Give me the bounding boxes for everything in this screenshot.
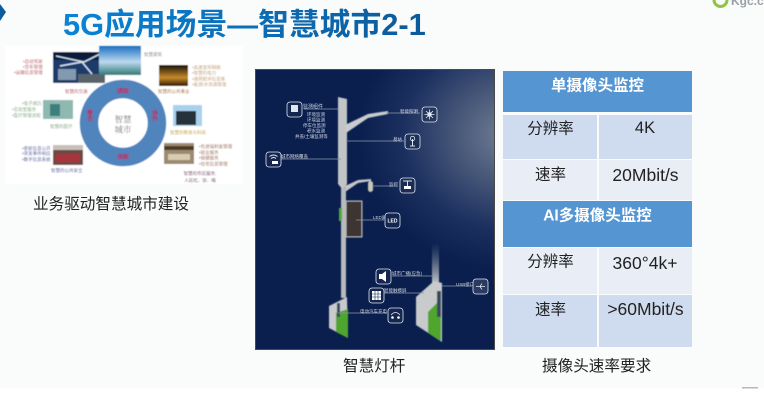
- ring chart: 协: [152, 109, 158, 117]
- text: smart transport: •货车管理: [23, 64, 43, 70]
- text: smart transport: [14, 58, 88, 95]
- header: single camera: 单摄像头监控: [551, 76, 644, 94]
- icon: USB: [473, 279, 488, 294]
- row: rate 60Mbit/s: >60Mbit/s: [607, 299, 684, 319]
- caption: camera rate requirements: 摄像头速率要求: [542, 357, 652, 375]
- text: smart transport: 智慧的交通: [65, 88, 88, 95]
- icon: LED: LED: [388, 218, 398, 224]
- lamp labels: 环境监测: [307, 111, 325, 118]
- row: rate 60Mbit/s: 速率: [535, 300, 566, 318]
- image: smart building: [99, 46, 141, 75]
- image: public safety: [53, 145, 83, 165]
- text: public safety: 智慧的公共安全: [51, 167, 83, 174]
- text: healthcare: •实验室服务: [12, 106, 37, 113]
- title: 5G应用场景—智慧城市2-1: [63, 7, 426, 42]
- text: healthcare: 智慧的医疗: [50, 123, 73, 130]
- row: resolution 4K: [503, 115, 692, 159]
- panel: smart city diagram: [5, 46, 243, 184]
- text: healthcare: [12, 100, 73, 130]
- panel: smart lamp post: [255, 69, 495, 350]
- text: smart transport: •自动驾驶: [23, 58, 43, 65]
- text: public safety: •更新信息公开: [22, 145, 51, 152]
- lamp labels: LED屏: [373, 215, 387, 221]
- row: rate 20Mbit/s: 速率: [535, 166, 566, 184]
- image: public utilities: [159, 65, 188, 86]
- text: healthcare: •医疗管理流程: [12, 112, 41, 119]
- image: healthcare: [43, 100, 73, 119]
- caption: smart city: 业务驱动智慧城市建设: [33, 195, 189, 213]
- row: rate 20Mbit/s: 20Mbit/s: [612, 165, 679, 185]
- lamp labels: 基站: [393, 136, 402, 143]
- header: AI multi camera: [503, 201, 692, 247]
- table: camera rate requirements: [503, 71, 692, 347]
- text: public utilities: •智慧的电力: [192, 70, 217, 76]
- ring chart: 合: [87, 115, 93, 123]
- row: resolution 360 4k+: [503, 248, 692, 294]
- ring chart: 创新: [117, 153, 129, 161]
- icon: base station: [405, 134, 420, 149]
- lamp labels: 城市网络覆盖: [281, 153, 308, 160]
- text: civil services: 智慧的市民服务:: [184, 170, 216, 177]
- text: civil services: •保健服务: [199, 154, 219, 162]
- lamp labels: 电动汽车充电: [360, 308, 387, 315]
- icon: keypad: [369, 288, 384, 303]
- caption: smart lamp post: 智慧灯杆: [343, 357, 406, 375]
- image: smart transport: [53, 52, 105, 83]
- logo: [714, 0, 764, 8]
- lamp labels: 监控: [389, 181, 398, 188]
- ring chart: 感知: [117, 87, 129, 95]
- ring chart: 整: [87, 109, 93, 117]
- icon: smart lighting: [422, 107, 437, 122]
- icon: surveillance: [400, 178, 415, 193]
- lamp labels: 监测组件: [303, 103, 323, 110]
- text: public utilities: •能源/水资源管理: [192, 81, 227, 88]
- lamp labels: 积水监测: [307, 128, 325, 134]
- image: civil services: [164, 143, 194, 164]
- text: education: 智慧的教育与科技: [170, 129, 206, 136]
- row: rate 20Mbit/s: [503, 160, 692, 200]
- row: resolution 360 4k+: 分辨率: [527, 252, 574, 270]
- icon: speaker: [376, 269, 391, 284]
- lamp labels: 城市广播(应急): [392, 270, 422, 277]
- text: smart transport: •运输信息管理: [14, 69, 43, 76]
- lamp labels: 停车位监测: [303, 122, 326, 129]
- icon: network coverage: [266, 152, 281, 167]
- LED screen: [346, 201, 362, 237]
- text: public utilities: 智慧的公共事业: [158, 88, 190, 95]
- text: civil services: •住宅信息管理: [199, 160, 228, 168]
- text: civil services: •先进福利金管理: [199, 143, 233, 150]
- second lamp post base: [416, 243, 442, 342]
- text: public utilities: [158, 64, 227, 95]
- ring chart: 作: [152, 115, 158, 123]
- ring chart: 智慧: [114, 114, 132, 126]
- lamp post main: [329, 97, 388, 338]
- text: civil services: [184, 143, 233, 184]
- row: resolution 360 4k+: 360°4k+: [613, 253, 677, 273]
- row: resolution 4K: 分辨率: [527, 120, 574, 138]
- page number mark: [742, 387, 758, 388]
- image: education: [173, 105, 202, 126]
- text: public utilities: •通用配评信息库: [192, 76, 226, 82]
- lamp labels: [281, 103, 474, 315]
- lamp labels: 智能触摸屏: [384, 287, 407, 294]
- ring chart: [87, 87, 158, 161]
- text: healthcare: •电子病历: [22, 100, 42, 107]
- connector lines: [281, 109, 472, 313]
- lamp labels: 环境监测: [307, 116, 325, 124]
- row: rate 60Mbit/s: [503, 295, 692, 347]
- header: AI multi camera: AI多摄像头监控: [543, 206, 652, 224]
- icon: corner diamond: [0, 4, 6, 21]
- row: resolution 4K: 4K: [635, 119, 655, 137]
- header: single camera: [503, 71, 692, 112]
- text: public safety: •突发事件响应: [22, 150, 51, 157]
- text: public safety: [22, 145, 83, 174]
- base: [329, 297, 348, 338]
- ring chart: 城市: [114, 124, 132, 136]
- icon: monitoring: [287, 102, 302, 117]
- lamp labels: 井盖/土壤监测等: [295, 133, 328, 140]
- icon: EV charging: [388, 308, 403, 323]
- text: public safety: •数字信息系统: [22, 156, 51, 163]
- text: smart building: 智慧建筑: [144, 51, 162, 58]
- text: public utilities: •高速宽带网络: [192, 64, 221, 71]
- lamp labels: USB接口: [456, 281, 474, 288]
- icon: LED: [385, 213, 400, 228]
- text: civil services: •就业服务: [199, 149, 219, 156]
- text: civil services: 人民吃、穿、喝: [184, 177, 216, 184]
- lamp labels: 智能照明: [400, 108, 418, 115]
